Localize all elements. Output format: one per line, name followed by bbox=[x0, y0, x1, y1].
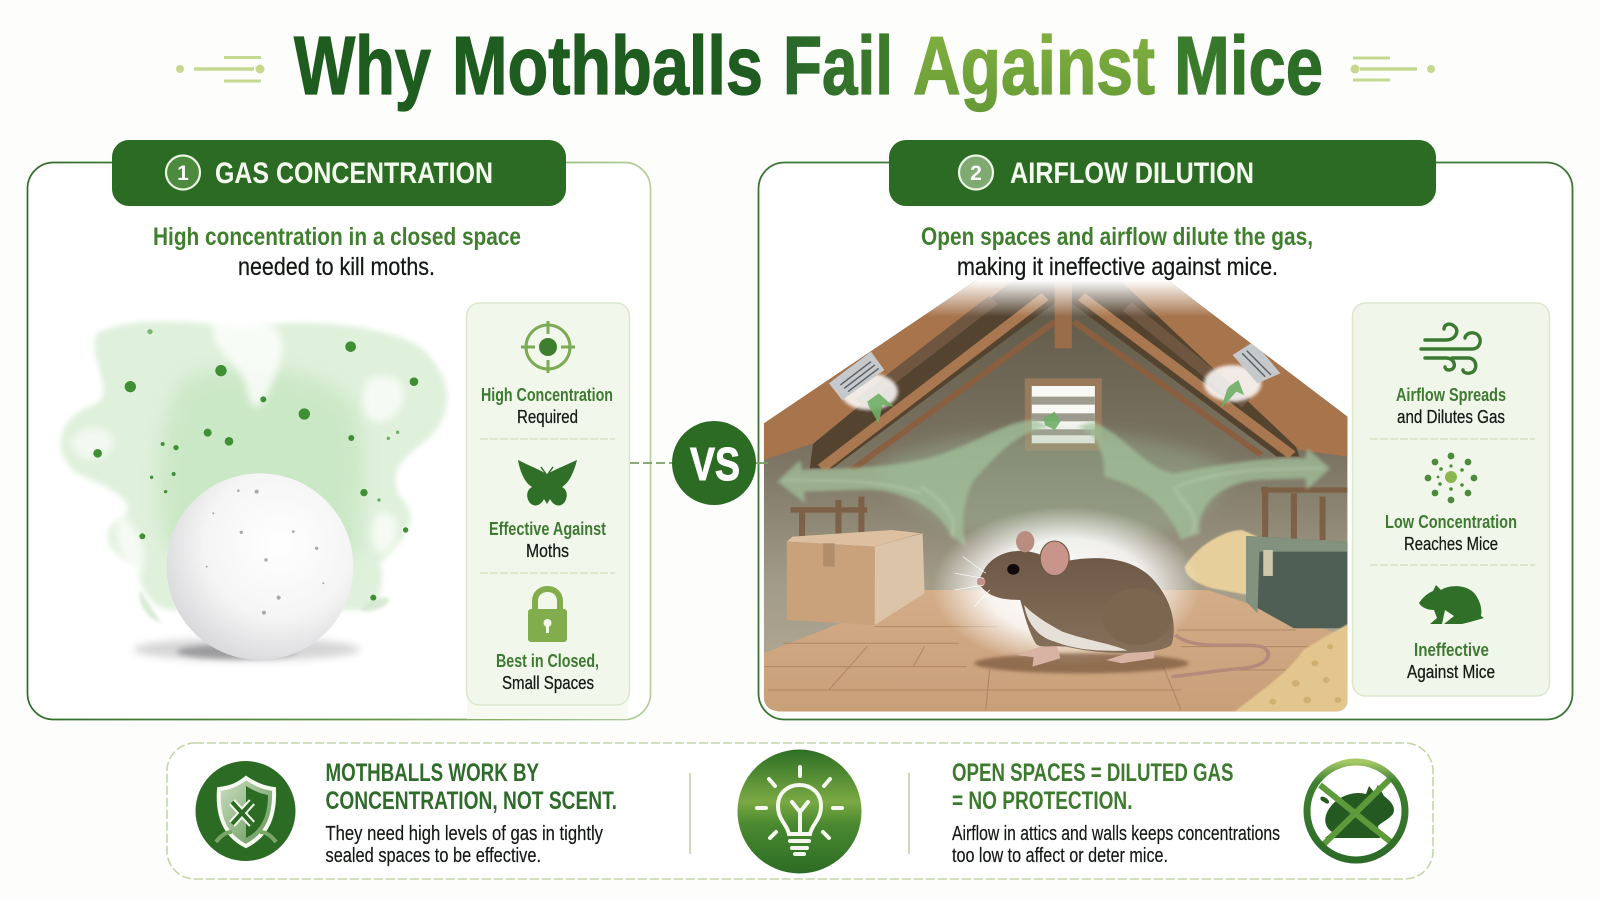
top fade bbox=[926, 280, 1213, 315]
eye bbox=[1007, 564, 1019, 575]
subheading: needed to kill moths. bbox=[238, 253, 435, 281]
floor bbox=[764, 590, 1347, 712]
gas wisps bbox=[783, 468, 1323, 537]
label: best in closed spaces: Best in Closed, bbox=[496, 651, 599, 671]
metal chest bbox=[1246, 536, 1347, 628]
illustration: mothball with gas cloud bbox=[61, 316, 447, 661]
heading pill: 1 bbox=[177, 162, 189, 185]
label: airflow spreads: and Dilutes Gas bbox=[1397, 407, 1505, 427]
sidebar: mouse facts bbox=[1352, 303, 1550, 696]
body bbox=[978, 551, 1174, 653]
gas cloud bbox=[61, 316, 447, 623]
center post bbox=[1055, 280, 1072, 348]
back wall bbox=[760, 280, 1360, 720]
subheading bbox=[153, 223, 521, 281]
ball speckles bbox=[206, 489, 324, 615]
icon: lock bbox=[528, 589, 567, 642]
label: effective against moths: Moths bbox=[526, 541, 569, 561]
subheading bbox=[921, 223, 1313, 281]
title decoration: right bbox=[1351, 58, 1434, 80]
takeaway: concentration bbox=[326, 759, 617, 867]
vent: gable window bbox=[1025, 378, 1102, 451]
icon: moth bbox=[518, 460, 577, 506]
takeaway: dilution: Airflow in attics and walls keeps concentrations bbox=[952, 823, 1280, 845]
label: airflow spreads: Airflow Spreads bbox=[1396, 385, 1506, 405]
label: ineffective against mice bbox=[1407, 640, 1495, 682]
label: low concentration bbox=[1385, 512, 1517, 554]
vent: left roof bbox=[829, 352, 898, 410]
title words: Why bbox=[294, 19, 431, 112]
label: ineffective against mice: Ineffective bbox=[1414, 640, 1489, 660]
label: low concentration: Reaches Mice bbox=[1404, 534, 1498, 554]
takeaway: concentration: sealed spaces to be effective. bbox=[326, 845, 541, 867]
subheading: Open spaces and airflow dilute the gas, bbox=[921, 223, 1313, 251]
title words: Mice bbox=[1174, 19, 1323, 112]
airflow arrows: vents bbox=[867, 380, 1244, 430]
takeaway: dilution: too low to affect or deter mice. bbox=[952, 845, 1168, 867]
takeaway: dilution bbox=[952, 759, 1280, 867]
label: high concentration bbox=[481, 385, 613, 427]
ears bbox=[1016, 531, 1034, 552]
heading pill bbox=[889, 140, 1436, 206]
subheading: High concentration in a closed space bbox=[153, 223, 521, 251]
icon: light bulb bbox=[738, 750, 862, 874]
takeaway: concentration: CONCENTRATION, NOT SCENT. bbox=[326, 787, 617, 815]
takeaway: dilution: = NO PROTECTION. bbox=[952, 787, 1132, 815]
subheading: making it ineffective against mice. bbox=[957, 253, 1278, 281]
icon: shield with X bbox=[196, 761, 296, 861]
insulation pile: front bbox=[1235, 623, 1349, 712]
label: airflow spreads bbox=[1396, 385, 1506, 427]
panel: airflow dilution bbox=[758, 140, 1572, 720]
takeaway: dilution: OPEN SPACES = DILUTED GAS bbox=[952, 759, 1234, 787]
whiskers bbox=[955, 557, 990, 607]
gas haze: dark smoke layer bbox=[875, 432, 1231, 544]
heading pill: AIRFLOW DILUTION bbox=[1010, 157, 1254, 190]
glow behind mouse bbox=[932, 507, 1200, 667]
roof rafters bbox=[764, 280, 1347, 470]
panel outline bbox=[758, 162, 1572, 720]
chest and belly bbox=[1024, 605, 1127, 651]
title words: Mothballs bbox=[452, 19, 763, 112]
label: low concentration: Low Concentration bbox=[1385, 512, 1517, 532]
label: best in closed spaces bbox=[496, 651, 599, 693]
label: best in closed spaces: Small Spaces bbox=[502, 673, 594, 693]
vent: right roof bbox=[1204, 342, 1280, 402]
feet bbox=[1016, 645, 1154, 667]
title words: Fail bbox=[783, 19, 893, 112]
nose bbox=[977, 577, 985, 586]
title words: Against bbox=[913, 19, 1155, 112]
right storage frame bbox=[1261, 487, 1347, 540]
haunch bbox=[1118, 640, 1156, 645]
tail bbox=[1171, 635, 1268, 677]
mothball bbox=[167, 473, 353, 660]
versus badge bbox=[630, 421, 768, 505]
title bbox=[176, 19, 1434, 112]
panel: key takeaways bbox=[167, 743, 1433, 879]
gas particles bbox=[93, 329, 418, 601]
label: effective against moths: Effective Against bbox=[489, 519, 606, 539]
label: effective against moths bbox=[489, 519, 606, 561]
sidebar: moth facts bbox=[466, 303, 630, 719]
versus badge: VS bbox=[690, 438, 740, 490]
takeaway: concentration: They need high levels of gas in tightly bbox=[326, 823, 603, 845]
label: high concentration: Required bbox=[517, 407, 578, 427]
heading pill bbox=[112, 140, 566, 206]
cardboard box bbox=[787, 530, 925, 625]
left storage frame bbox=[791, 497, 867, 540]
label: high concentration: High Concentration bbox=[481, 385, 613, 405]
heading pill: GAS CONCENTRATION bbox=[215, 157, 493, 190]
icon: target bbox=[521, 321, 575, 373]
takeaway: concentration: MOTHBALLS WORK BY bbox=[326, 759, 539, 787]
label: ineffective against mice: Against Mice bbox=[1407, 662, 1495, 682]
title decoration: left bbox=[176, 58, 264, 81]
panel: gas concentration bbox=[28, 140, 650, 720]
icon: wind bbox=[1421, 324, 1480, 373]
icon: dispersed particles bbox=[1425, 453, 1477, 503]
insulation pile: middle bbox=[1185, 530, 1258, 595]
airflow arrow: right bbox=[1078, 422, 1330, 540]
heading pill: 2 bbox=[970, 162, 982, 185]
icon: no mouse bbox=[1307, 762, 1405, 860]
panel outline bbox=[28, 162, 650, 720]
illustration: attic with mouse bbox=[760, 280, 1360, 720]
title words bbox=[294, 19, 1323, 112]
mouse bbox=[955, 531, 1268, 677]
icon: mouse silhouette bbox=[1419, 585, 1484, 624]
ball shadow bbox=[133, 638, 360, 661]
airflow arrow: left bbox=[777, 420, 1051, 547]
